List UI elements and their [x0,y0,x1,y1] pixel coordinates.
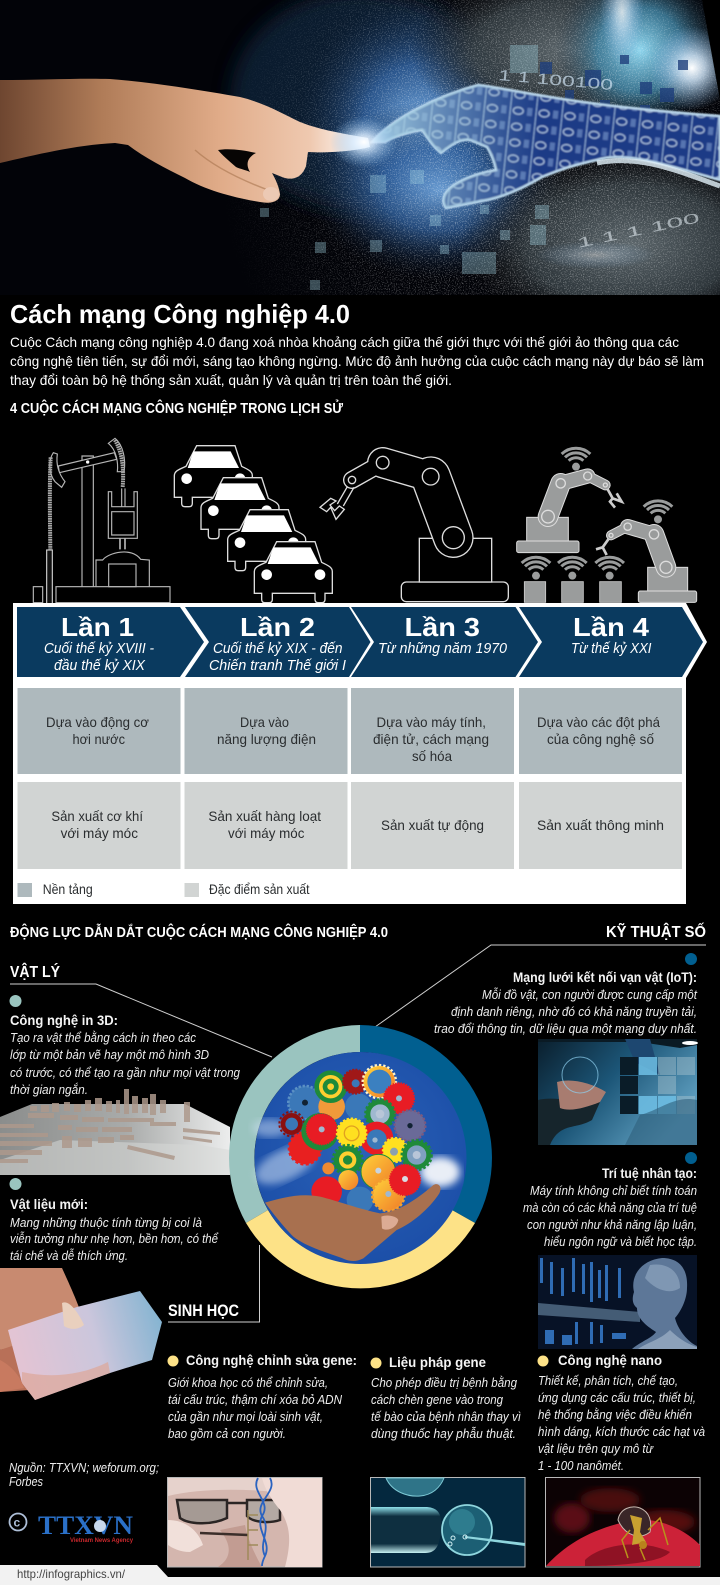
section heading: drivers: ĐỘNG LỰC DẪN DẮT CUỘC CÁCH MẠNG CÔNG NGHIỆP 4.0 [10,923,388,941]
block: new materials: tái chế và dễ thích ứng. [10,1248,128,1263]
block: gene editing: tái cấu trúc, thậm chí xóa bỏ ADN [168,1392,343,1407]
photo: DNA research [168,1478,322,1567]
block: gene therapy: Liệu pháp gene [389,1355,486,1370]
hero image: human hand touching digital hand [0,0,720,295]
block: nanotechnology: vật liệu trên quy mô từ [538,1441,654,1456]
source [9,1460,159,1489]
sky [254,1052,466,1264]
block: AI: Máy tính không chỉ biết tính toán [530,1183,697,1198]
row: foundation: năng lượng điện [217,731,316,747]
block: new materials: Vật liệu mới: [10,1197,88,1212]
block: IoT: Mỗi đồ vật, con người được cung cấp một [482,987,698,1002]
row: foundation: của công nghệ số [547,731,654,747]
chevron: Lần 4: Từ thế kỷ XXI [571,641,652,657]
pedestals [524,582,621,602]
chevron: Lần 3: Lần 3 [404,612,480,642]
block: gene editing: của gần như mọi loài sinh vật, [168,1409,323,1424]
block: gene therapy: dùng thuốc hay phẫu thuật. [371,1426,516,1441]
heading: biology: SINH HỌC [168,1302,239,1320]
block: gene editing: bao gồm cả con người. [168,1426,286,1441]
block: 3D printing: có trước, có thể tạo ra gần như mọi vật trong [10,1065,241,1080]
connector lines [10,945,706,1322]
intro paragraph [10,334,704,388]
row: production characteristics: với máy móc [228,825,304,841]
block: IoT: định danh riêng, nhờ đó có khả năng truyền tải, [451,1004,697,1019]
intro paragraph: thay đổi toàn bộ hệ thống sản xuất, quản lý và quản trị trên toàn thế giới. [10,372,452,388]
touch glow [330,116,398,168]
photo: hand holding aerogel block [0,1268,162,1400]
block: nanotechnology: hệ thống bằng việc điều khiển [538,1407,692,1422]
logo: TTXVN: Vietnam News Agency [70,1538,134,1544]
chevron: Lần 3 [351,607,538,677]
block: 3D printing: lớp từ một bản vẽ hay một mô hình 3D [10,1047,209,1062]
cupped hand [265,1184,441,1261]
block: IoT: trao đổi thông tin, dữ liệu qua một mạng duy nhất. [434,1021,697,1036]
row: foundation: Dựa vào [240,714,289,730]
row: production characteristics: Sản xuất thông minh [537,817,664,833]
row: production characteristics: Sản xuất tự động [381,817,484,833]
row: production characteristics: Sản xuất hàng loạt [208,808,321,824]
row: foundation: Dựa vào máy tính, [376,714,486,730]
chevron: Lần 1: đầu thế kỷ XIX [54,658,146,674]
legend [18,881,310,897]
block: new materials: Mang những thuộc tính từng bị coi là [10,1215,202,1230]
row: foundation: điện tử, cách mạng [373,731,489,747]
title: Cách mạng Công nghiệp 4.0 [10,299,350,329]
block: IoT [434,953,698,1036]
row: foundation: số hóa [412,748,452,764]
robot one [517,472,622,553]
central circle: gears in hand [229,1025,492,1288]
row: foundation: hơi nước [72,731,125,747]
chevron: Lần 2: Lần 2 [240,612,315,642]
block: 3D printing [10,995,241,1097]
block: gene therapy [370,1355,521,1441]
icon: four cars [174,446,332,603]
block: gene editing [168,1353,357,1441]
wifi signals [522,448,672,580]
block: AI: hiểu ngôn ngữ và biết học tập. [544,1234,697,1249]
block: gene editing: Công nghệ chỉnh sửa gene: [186,1353,357,1368]
chevron: Lần 2 [185,607,370,677]
block: nanotechnology: ứng dụng các cấu trúc, thiết bị, [538,1390,696,1405]
chevron: Lần 1 [17,607,204,677]
row: foundation [18,688,682,774]
row: production characteristics: Sản xuất cơ khí [51,808,143,824]
human hand [0,79,370,203]
binary digits: 1 1 100100 [498,67,614,94]
row: foundation: Dựa vào các đột phá [537,714,660,730]
ring: biology [246,1210,475,1288]
row: production characteristics [18,782,682,869]
ring: digital [360,1025,492,1223]
block: 3D printing: thời gian ngắn. [10,1082,88,1097]
block: AI [523,1152,697,1249]
heading: physical: VẬT LÝ [10,963,61,981]
heading: digital: KỸ THUẬT SỐ [606,923,706,941]
photo: IoT touch screen [538,1039,698,1145]
block: AI: con người như khả năng lập luận, [527,1217,697,1232]
block: new materials [10,1178,219,1263]
photo: AI head [538,1255,697,1349]
logo: TTXVN: c [14,1516,20,1530]
panel: timeline table [13,603,707,904]
robot two [596,523,697,602]
digital hand [372,85,720,208]
chevron: Lần 2: Cuối thế kỷ XIX - đến [213,641,342,657]
intro paragraph: công nghệ tiên tiến, sự đổi mới, sáng tạo không ngừng. Mức độ ảnh hưởng của cuộc cách mạng này dự báo sẽ làm [10,353,704,369]
block: nanotechnology: Thiết kế, phân tích, chế tạo, [538,1373,678,1388]
block: gene therapy: tế bào của bệnh nhân thay vì [371,1409,521,1424]
block: nanotechnology [538,1353,705,1473]
chevron: Lần 2: Chiến tranh Thế giới I [209,658,346,674]
block: gene therapy: Cho phép điều trị bệnh bằng [371,1375,518,1390]
icon: oil pump steam engine [33,438,170,605]
chevron: Lần 1: Cuối thế kỷ XVIII - [44,641,154,657]
chevron: Lần 3: Từ những năm 1970 [378,641,507,657]
block: 3D printing: Công nghệ in 3D: [10,1013,118,1028]
gears [279,1065,432,1213]
legend: Nền tảng [43,881,93,897]
block: gene therapy: cách chèn gene vào trong [371,1392,504,1407]
icon: connected robots with wifi [517,448,697,602]
footer: website strip: http://infographics.vn/ [17,1567,126,1581]
chevron: Lần 4 [519,607,703,677]
section heading: 4 revolutions: 4 CUỘC CÁCH MẠNG CÔNG NGHIỆP TRONG LỊCH SỬ [10,399,344,417]
block: nanotechnology: 1 - 100 nanômét. [538,1458,624,1473]
photo: cell injection [370,1478,525,1567]
photo: nanobot [546,1478,700,1567]
row: foundation: Dựa vào động cơ [46,714,149,730]
block: AI: Trí tuệ nhân tạo: [602,1166,697,1181]
block: AI: mà còn có các khả năng của trí tuệ [523,1200,697,1215]
block: gene editing: Giới khoa học có thể chỉnh sửa, [168,1375,328,1390]
source: Forbes [9,1474,43,1489]
logo: TTXVN [10,1511,134,1544]
logo: TTXVN: TTXVN [38,1511,133,1540]
chevron: Lần 1: Lần 1 [61,612,134,642]
block: 3D printing: Tạo ra vật thể bằng cách in theo các [10,1030,196,1045]
source: Nguồn: TTXVN; weforum.org; [9,1460,159,1475]
block: nanotechnology: Công nghệ nano [558,1353,662,1368]
footer: website strip [0,1565,720,1585]
photo: 3D printed city model [0,1089,230,1175]
row: production characteristics: với máy móc [61,825,138,841]
block: new materials: viễn tưởng như nhẹ hơn, bền hơn, có thể [10,1231,219,1246]
hero image: human hand touching digital hand: 1 1 1 100 [575,209,701,251]
legend: Đặc điểm sản xuất [209,881,310,897]
pixel squares [260,45,549,290]
block: IoT: Mạng lưới kết nối vạn vật (IoT): [513,970,697,985]
intro paragraph: Cuộc Cách mạng công nghiệp 4.0 đang xoá nhòa khoảng cách giữa thế giới thực với thế giới ảo thông qua các [10,334,679,350]
chevron: Lần 4: Lần 4 [573,612,650,642]
icon: robot arm outline [320,456,508,602]
ring: physical [229,1025,360,1223]
